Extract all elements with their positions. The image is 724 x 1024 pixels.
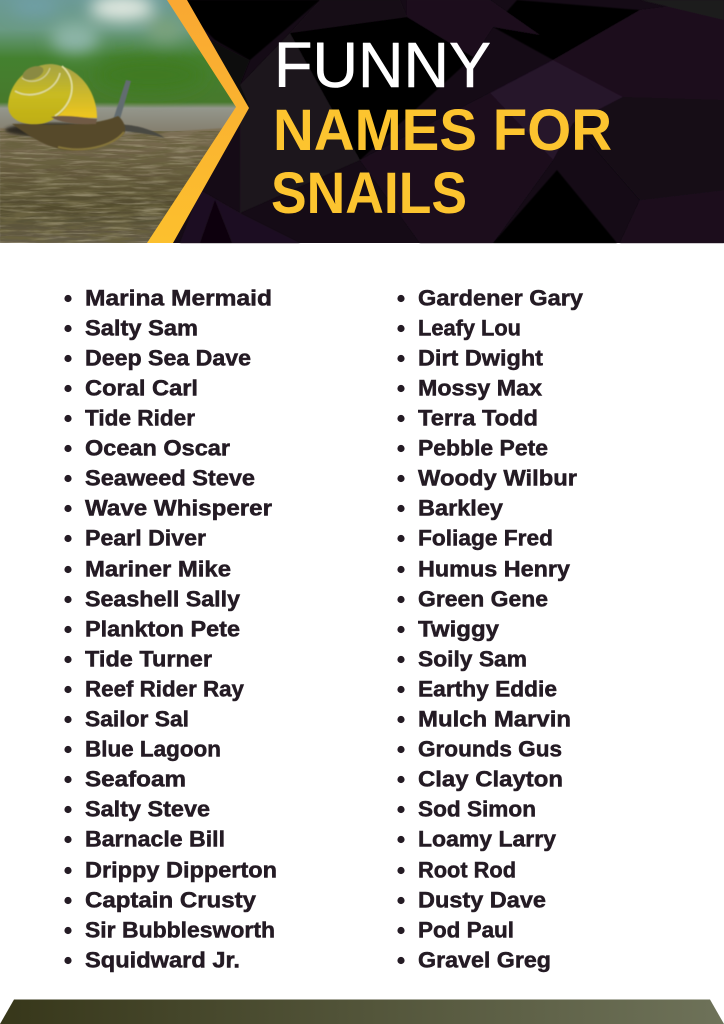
name: Gravel Greg: Gravel Greg <box>418 948 551 972</box>
left names column <box>64 286 277 972</box>
name: Earthy Eddie: Earthy Eddie <box>418 676 557 702</box>
title line: NAMES FOR: NAMES FOR <box>273 98 612 163</box>
name: Loamy Larry: Loamy Larry <box>418 826 557 852</box>
name: Seashell Sally: Seashell Sally <box>85 586 241 612</box>
name: Blue Lagoon: Blue Lagoon <box>85 736 221 762</box>
name: Grounds Gus: Grounds Gus <box>418 736 562 762</box>
name: Marina Mermaid: Marina Mermaid <box>85 286 272 310</box>
snail body <box>12 116 125 150</box>
name: Salty Steve: Salty Steve <box>85 796 210 822</box>
right names column <box>397 286 584 972</box>
name: Squidward Jr.: Squidward Jr. <box>85 948 240 972</box>
name: Green Gene: Green Gene <box>418 586 548 612</box>
name: Terra Todd: Terra Todd <box>418 406 538 430</box>
name: Twiggy: Twiggy <box>418 616 500 642</box>
name: Foliage Fred: Foliage Fred <box>418 526 553 550</box>
name: Sir Bubblesworth: Sir Bubblesworth <box>85 918 275 942</box>
snail shadow <box>4 122 80 138</box>
title line: SNAILS: SNAILS <box>271 161 467 226</box>
snail photo <box>0 0 250 243</box>
name: Pearl Diver: Pearl Diver <box>85 526 206 550</box>
name: Soily Sam: Soily Sam <box>418 646 527 672</box>
name: Mossy Max: Mossy Max <box>418 376 543 400</box>
name: Seaweed Steve: Seaweed Steve <box>85 466 255 490</box>
name: Dusty Dave: Dusty Dave <box>418 888 546 912</box>
name: Clay Clayton: Clay Clayton <box>418 766 563 792</box>
left whorl <box>8 64 74 124</box>
name: Salty Sam: Salty Sam <box>85 316 198 340</box>
name: Pebble Pete: Pebble Pete <box>418 436 548 460</box>
footer band <box>0 1000 724 1024</box>
snail <box>5 63 165 150</box>
name: Humus Henry: Humus Henry <box>418 556 571 582</box>
spiral lines <box>15 73 60 95</box>
name: Sod Simon: Sod Simon <box>418 796 536 822</box>
name: Mulch Marvin: Mulch Marvin <box>418 706 571 732</box>
name: Mariner Mike: Mariner Mike <box>85 556 231 582</box>
name: Wave Whisperer: Wave Whisperer <box>85 496 272 520</box>
wooden log <box>0 128 222 243</box>
title <box>271 29 612 226</box>
name: Barkley: Barkley <box>418 496 504 520</box>
mantle lip <box>51 116 97 124</box>
name: Ocean Oscar: Ocean Oscar <box>85 436 230 460</box>
name: Leafy Lou: Leafy Lou <box>418 316 521 340</box>
name: Pod Paul: Pod Paul <box>418 918 514 942</box>
name: Deep Sea Dave: Deep Sea Dave <box>85 346 251 370</box>
name: Dirt Dwight: Dirt Dwight <box>418 346 544 370</box>
yellow chevron <box>147 0 249 243</box>
name: Plankton Pete: Plankton Pete <box>85 616 240 642</box>
right body whorl <box>58 66 98 119</box>
name: Tide Rider: Tide Rider <box>85 406 195 430</box>
dark geometric background <box>0 0 724 243</box>
name: Coral Carl: Coral Carl <box>85 376 198 400</box>
name: Sailor Sal: Sailor Sal <box>85 706 189 732</box>
header banner <box>0 0 724 243</box>
snail tentacles <box>113 80 165 138</box>
snail shell <box>8 63 97 124</box>
blurred foliage highlights <box>11 0 205 93</box>
name: Gardener Gary: Gardener Gary <box>418 286 584 310</box>
name: Seafoam: Seafoam <box>85 766 186 792</box>
name: Reef Rider Ray: Reef Rider Ray <box>85 676 245 702</box>
name: Drippy Dipperton: Drippy Dipperton <box>85 858 277 882</box>
title line: FUNNY: FUNNY <box>274 29 491 101</box>
name: Barnacle Bill: Barnacle Bill <box>85 826 225 852</box>
name: Tide Turner: Tide Turner <box>85 646 212 672</box>
name: Root Rod: Root Rod <box>418 858 516 882</box>
name: Captain Crusty: Captain Crusty <box>85 888 257 912</box>
name: Woody Wilbur: Woody Wilbur <box>418 466 577 490</box>
